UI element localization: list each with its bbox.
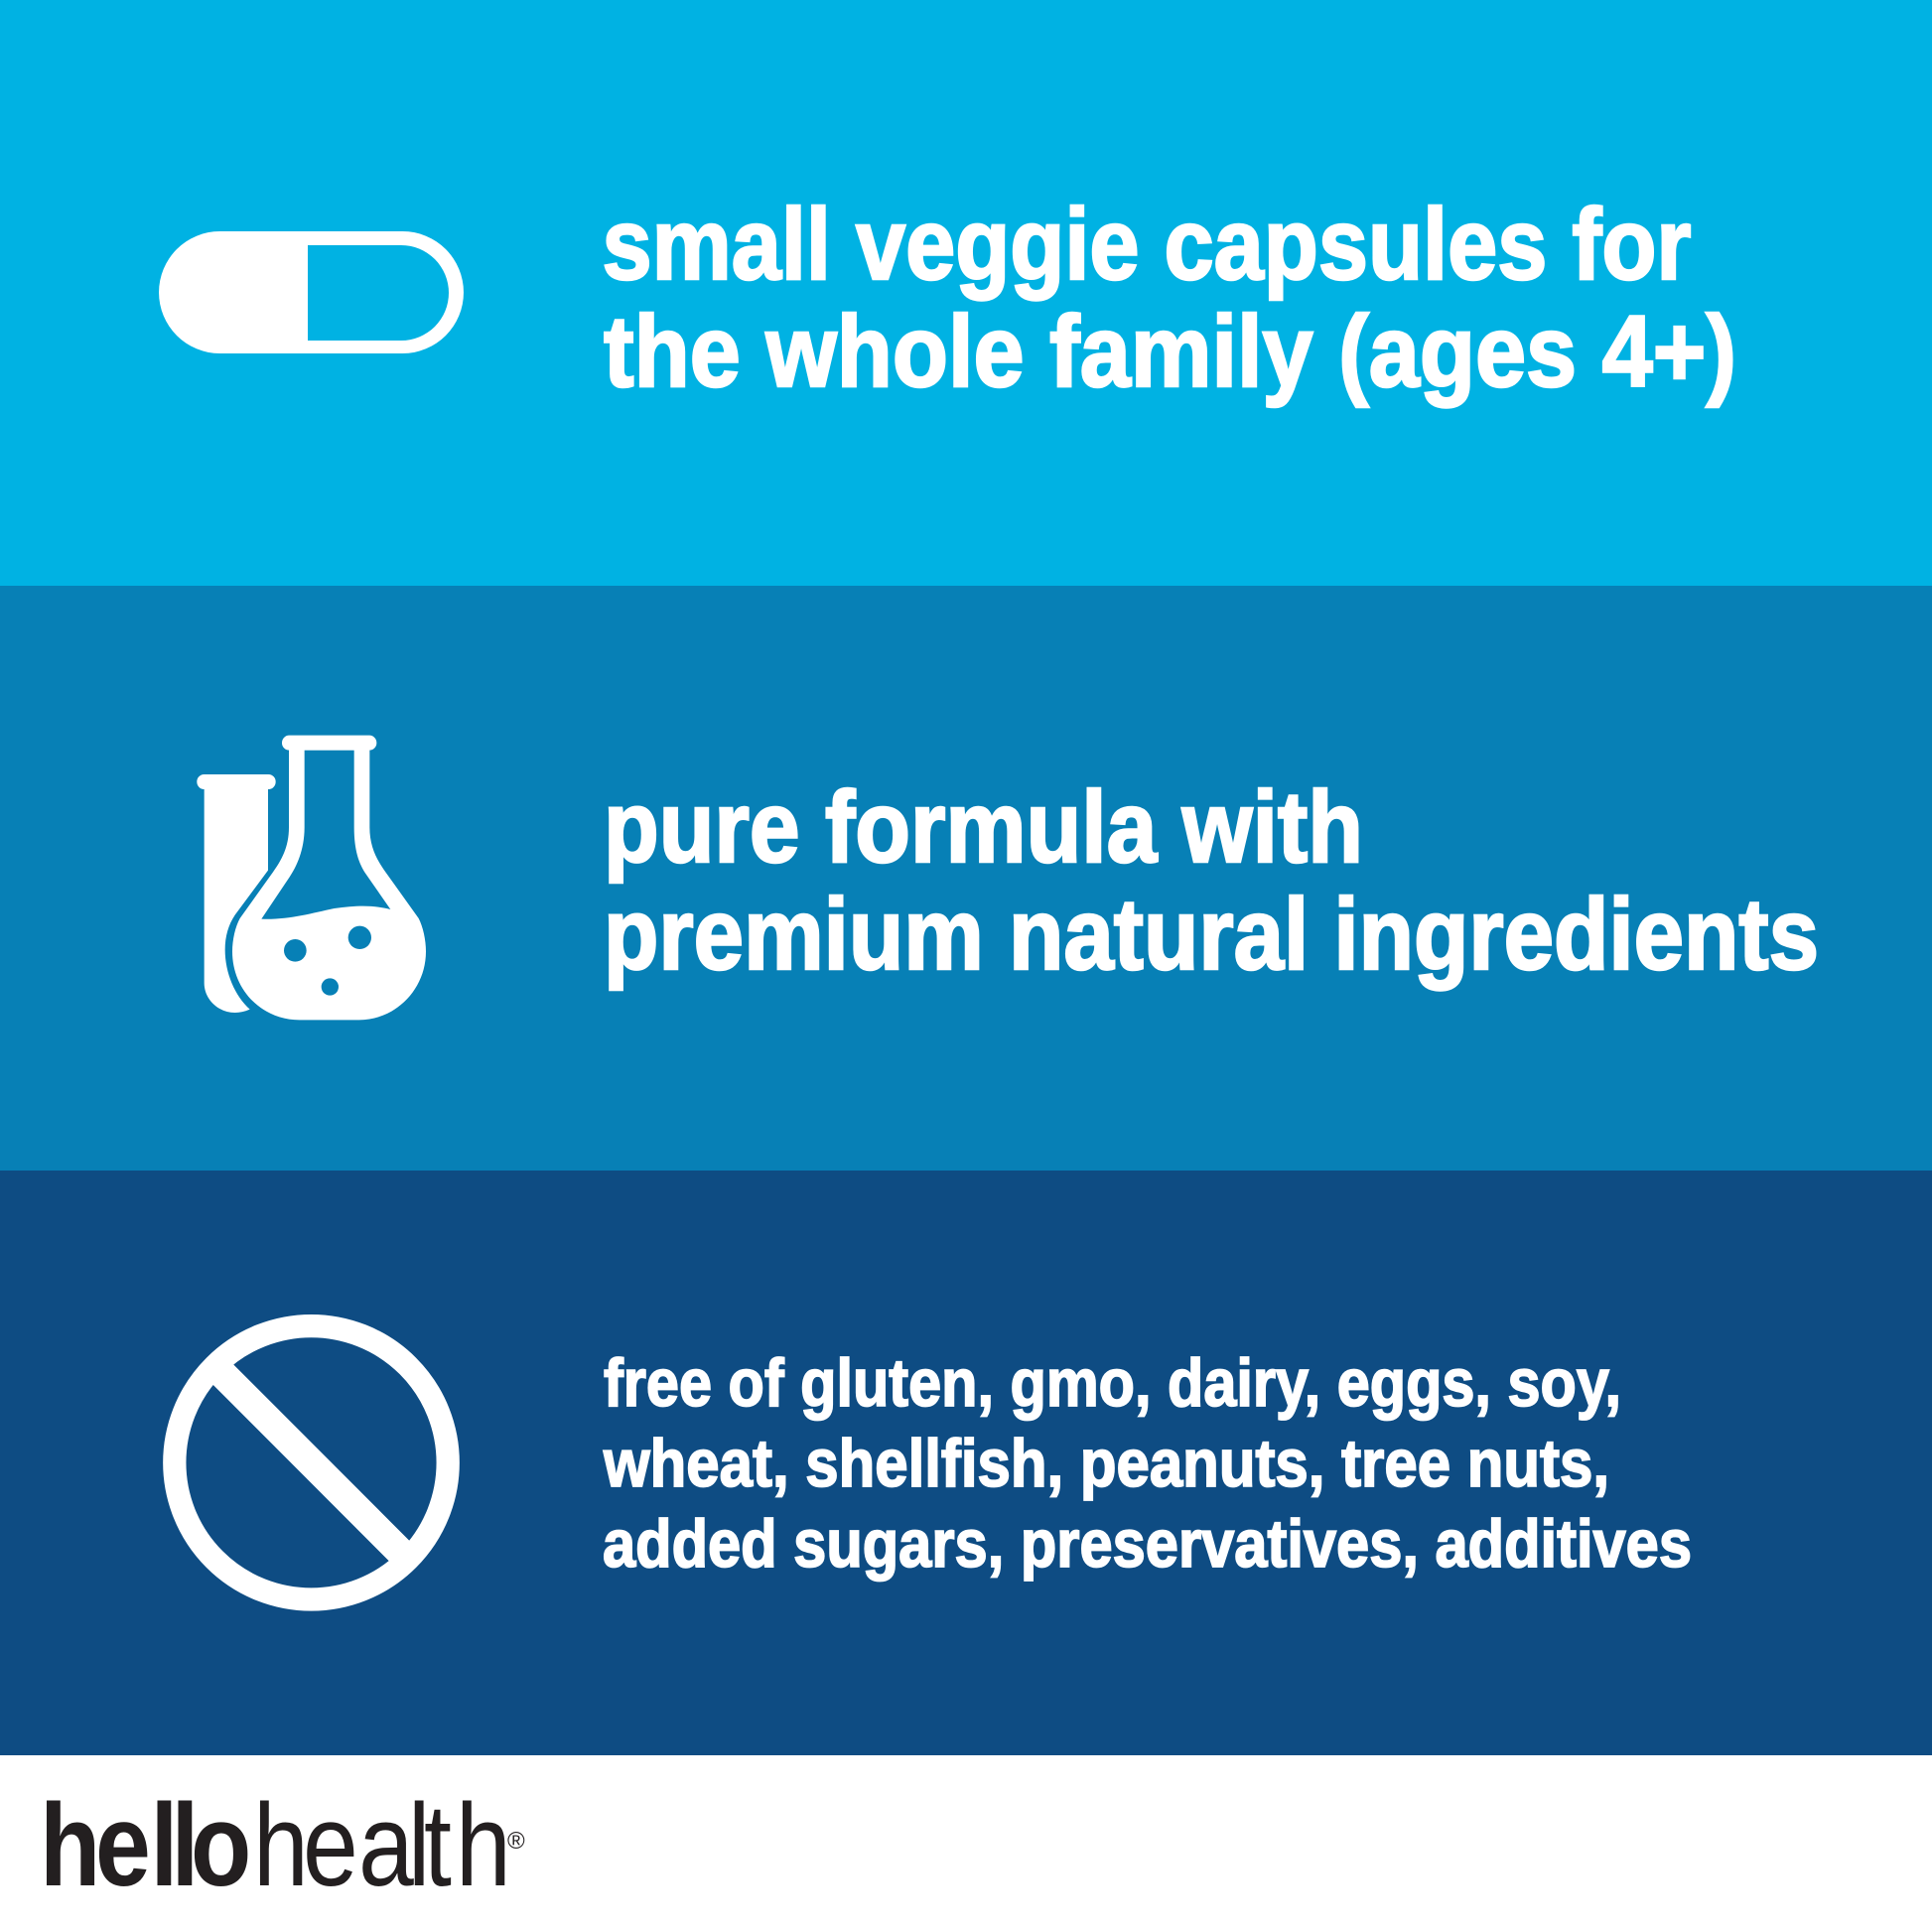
heading: pure formula text xyxy=(604,770,1819,991)
logo: hellohealth: hello xyxy=(40,1780,251,1911)
text: free of list: wheat, shellfish, peanuts, tree nuts, xyxy=(603,1426,1609,1501)
logo: hellohealth: health xyxy=(253,1780,511,1911)
panel: small veggie capsules xyxy=(0,0,1932,586)
heading: capsules text: the whole family (ages 4+) xyxy=(604,295,1736,408)
logo: hellohealth: ® xyxy=(507,1828,525,1855)
icon: capsule xyxy=(159,231,464,353)
panel: free of allergens xyxy=(0,1171,1932,1755)
heading: capsules text: small veggie capsules for xyxy=(602,188,1692,301)
text: free of list: added sugars, preservatives, additives xyxy=(603,1506,1692,1582)
panel: pure formula xyxy=(0,586,1932,1171)
icon: test tube and flask xyxy=(197,736,426,1020)
heading: pure formula text: premium natural ingredients xyxy=(604,878,1819,991)
text: free of list xyxy=(603,1345,1692,1582)
text: free of list: free of gluten, gmo, dairy, eggs, soy, xyxy=(604,1345,1621,1421)
heading: pure formula text: pure formula with xyxy=(604,770,1363,884)
heading: capsules text xyxy=(602,188,1736,408)
icon: prohibition sign xyxy=(175,1326,448,1599)
logo: hellohealth xyxy=(40,1780,525,1911)
